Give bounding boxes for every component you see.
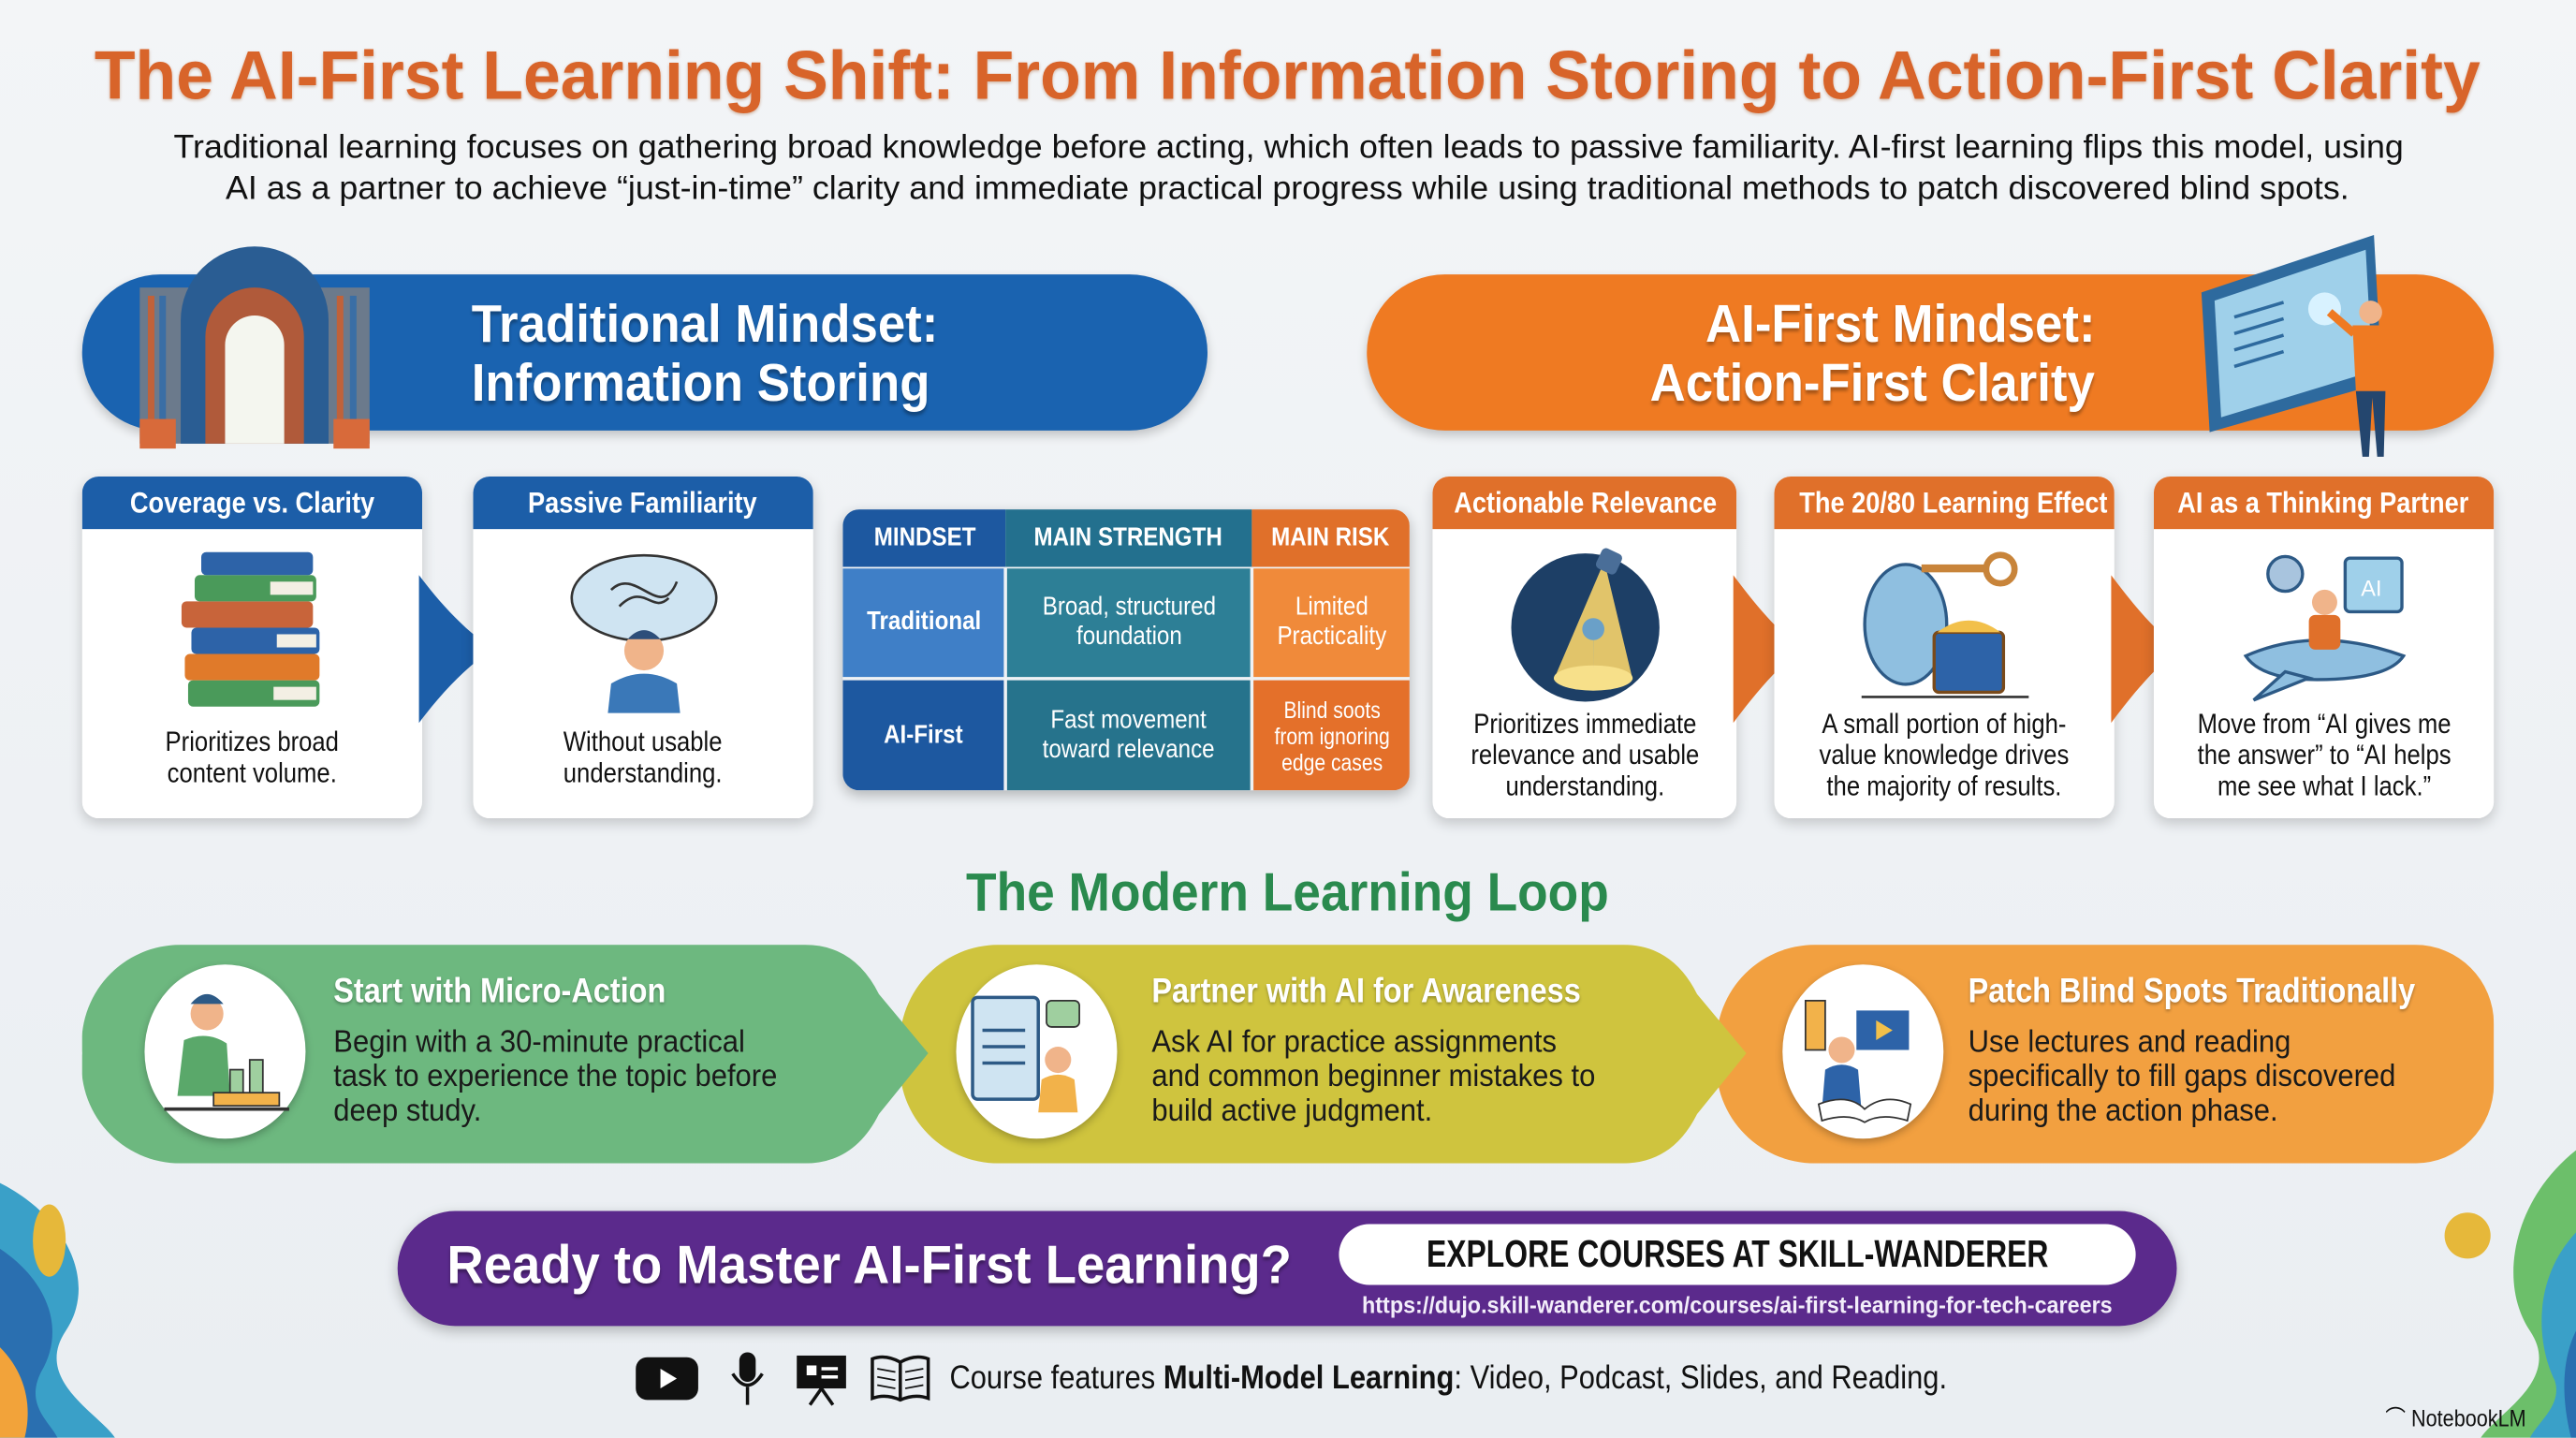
title: The AI-First Learning Shift: From Information Storing to Action-First Clarity: [95, 37, 2481, 113]
comparison table: toward relevance: [1043, 735, 1215, 763]
icon: slides: [797, 1356, 846, 1406]
loop step: patch blind spots: [1719, 945, 2494, 1164]
icon: book: [871, 1356, 930, 1402]
table header: MINDSET: [873, 523, 975, 551]
comparison table: Limited: [1295, 594, 1368, 621]
comparison table: MAIN STRENGTH: [1034, 523, 1222, 551]
card: AI as thinking partner: AI as a Thinking Partner: [2178, 487, 2469, 520]
watermark: NotebookLM: ⌒ NotebookLM: [2385, 1405, 2526, 1431]
banner: traditional mindset: [82, 274, 1208, 431]
icon: spotlight: [1511, 549, 1660, 702]
comparison table: Broad, structured: [1042, 594, 1215, 621]
loop step: patch blind spots: Patch Blind Spots Traditionally: [1969, 973, 2415, 1010]
arrow: orange 1: [1734, 575, 1775, 723]
loop step: partner with AI: build active judgment.: [1151, 1094, 1432, 1129]
card: actionable relevance: Prioritizes immediate: [1473, 708, 1696, 740]
arrow: orange 2: [2111, 575, 2154, 723]
row: AI-first: [842, 681, 1003, 790]
subtitle: AI as a partner to achieve “just-in-time” clarity and immediate practical progress while using traditional methods to patch discovered blind spots.: [227, 171, 2349, 207]
comparison table: edge cases: [1281, 748, 1383, 775]
card: coverage vs clarity: Coverage vs. Clarity: [130, 487, 374, 520]
loop step: patch blind spots: Use lectures and reading: [1969, 1025, 2291, 1060]
loop step: micro-action: Begin with a 30-minute practical: [333, 1025, 745, 1060]
card: 20/80 learning effect: The 20/80 Learning Effect: [1799, 487, 2107, 520]
row: AI-first: AI-First: [884, 721, 963, 748]
footer text: Course features Multi-Model Learning: Video, Podcast, Slides, and Reading.: [949, 1360, 1947, 1397]
card: coverage vs clarity: Prioritizes broad: [166, 726, 339, 757]
icon: person at AI screen: [2202, 235, 2385, 457]
banner: AI-first mindset: [1367, 274, 2494, 431]
decorative corner waves: [0, 1183, 115, 1438]
row: traditional: Traditional: [866, 608, 980, 636]
card: actionable relevance: understanding.: [1505, 770, 1664, 801]
loop step: micro-action: task to experience the topic before: [333, 1060, 777, 1094]
heading: traditional mindset: Information Storing: [472, 353, 929, 413]
heading: AI-first mindset: AI-First Mindset:: [1705, 294, 2095, 353]
card: 20/80 learning effect: [1775, 477, 2115, 818]
CTA button: [1339, 1225, 2136, 1284]
card: coverage vs clarity: content volume.: [168, 757, 337, 788]
heading: traditional mindset: Traditional Mindset:: [472, 294, 938, 353]
card: passive familiarity: [473, 477, 813, 818]
icon: library archway: [139, 246, 370, 449]
icon: brain key chest: [1861, 551, 2029, 698]
loop step: patch blind spots: during the action phase.: [1969, 1094, 2278, 1129]
card: 20/80 learning effect: A small portion of high-: [1822, 708, 2067, 740]
heading: modern learning loop: The Modern Learning Loop: [967, 861, 1609, 922]
icon: book stack: [182, 552, 320, 707]
comparison table: from ignoring: [1274, 722, 1389, 748]
heading: AI-first mindset: Action-First Clarity: [1650, 353, 2095, 413]
comparison table: foundation: [1076, 623, 1181, 651]
loop step: partner with AI: Partner with AI for Awareness: [1151, 973, 1581, 1010]
loop step: micro-action: Start with Micro-Action: [333, 973, 666, 1010]
card: actionable relevance: relevance and usable: [1471, 740, 1699, 770]
card: coverage vs clarity: [82, 477, 422, 818]
subtitle: [173, 130, 2403, 207]
card: passive familiarity: Without usable: [564, 726, 723, 757]
loop step: micro-action: [82, 945, 929, 1163]
CTA url: https://dujo.skill-wanderer.com/courses/ai-first-learning-for-tech-careers: [1362, 1292, 2113, 1318]
icon: confused thinker: [570, 554, 718, 713]
row: traditional: [842, 568, 1003, 677]
heading: AI-first mindset: [1650, 294, 2095, 418]
card: 20/80 learning effect: value knowledge drives: [1820, 740, 2070, 770]
icon: person building: [144, 964, 305, 1138]
icon: mic: [731, 1352, 764, 1405]
card: AI as thinking partner: me see what I lack.”: [2217, 770, 2431, 801]
table header: [842, 509, 1005, 567]
card: 20/80 learning effect: the majority of results.: [1827, 770, 2062, 801]
icon: video: [636, 1357, 698, 1401]
card: AI as thinking partner: the answer” to “AI helps: [2197, 740, 2451, 770]
CTA banner: [398, 1211, 2177, 1326]
CTA button: EXPLORE COURSES AT SKILL-WANDERER: [1427, 1232, 2048, 1275]
comparison table: [842, 509, 1410, 790]
comparison table: Blind soots: [1283, 696, 1380, 722]
icon: robot and person on jet: AI: [2360, 577, 2381, 601]
card: actionable relevance: [1432, 477, 1736, 818]
comparison table: Fast movement: [1051, 706, 1207, 734]
loop step: micro-action: deep study.: [333, 1094, 481, 1129]
icon: robot and person on jet: [2243, 554, 2406, 702]
comparison table: MAIN RISK: [1272, 523, 1390, 551]
card: actionable relevance: Actionable Relevance: [1454, 487, 1717, 520]
subtitle: Traditional learning focuses on gathering broad knowledge before acting, which often leads to passive familiarity. AI-first learning flips this model, using: [173, 130, 2403, 166]
card: passive familiarity: understanding.: [564, 757, 723, 788]
icon: AI chat screen: [956, 964, 1117, 1138]
CTA heading: Ready to Master AI-First Learning?: [446, 1234, 1292, 1295]
heading: traditional mindset: [470, 294, 938, 418]
loop step: partner with AI: and common beginner mistakes to: [1151, 1060, 1595, 1094]
icon: reading with video: [1782, 964, 1943, 1138]
card: AI as thinking partner: Move from “AI gives me: [2197, 708, 2451, 740]
arrow: blue: [419, 575, 474, 723]
card: passive familiarity: Passive Familiarity: [529, 487, 757, 520]
loop step: partner with AI: Ask AI for practice assignments: [1151, 1025, 1557, 1060]
loop step: partner with AI: [902, 945, 1747, 1164]
loop step: patch blind spots: specifically to fill gaps discovered: [1969, 1060, 2395, 1094]
comparison table: Practicality: [1277, 623, 1386, 651]
footer features: [636, 1352, 1947, 1406]
card: AI as thinking partner: [2154, 477, 2494, 818]
